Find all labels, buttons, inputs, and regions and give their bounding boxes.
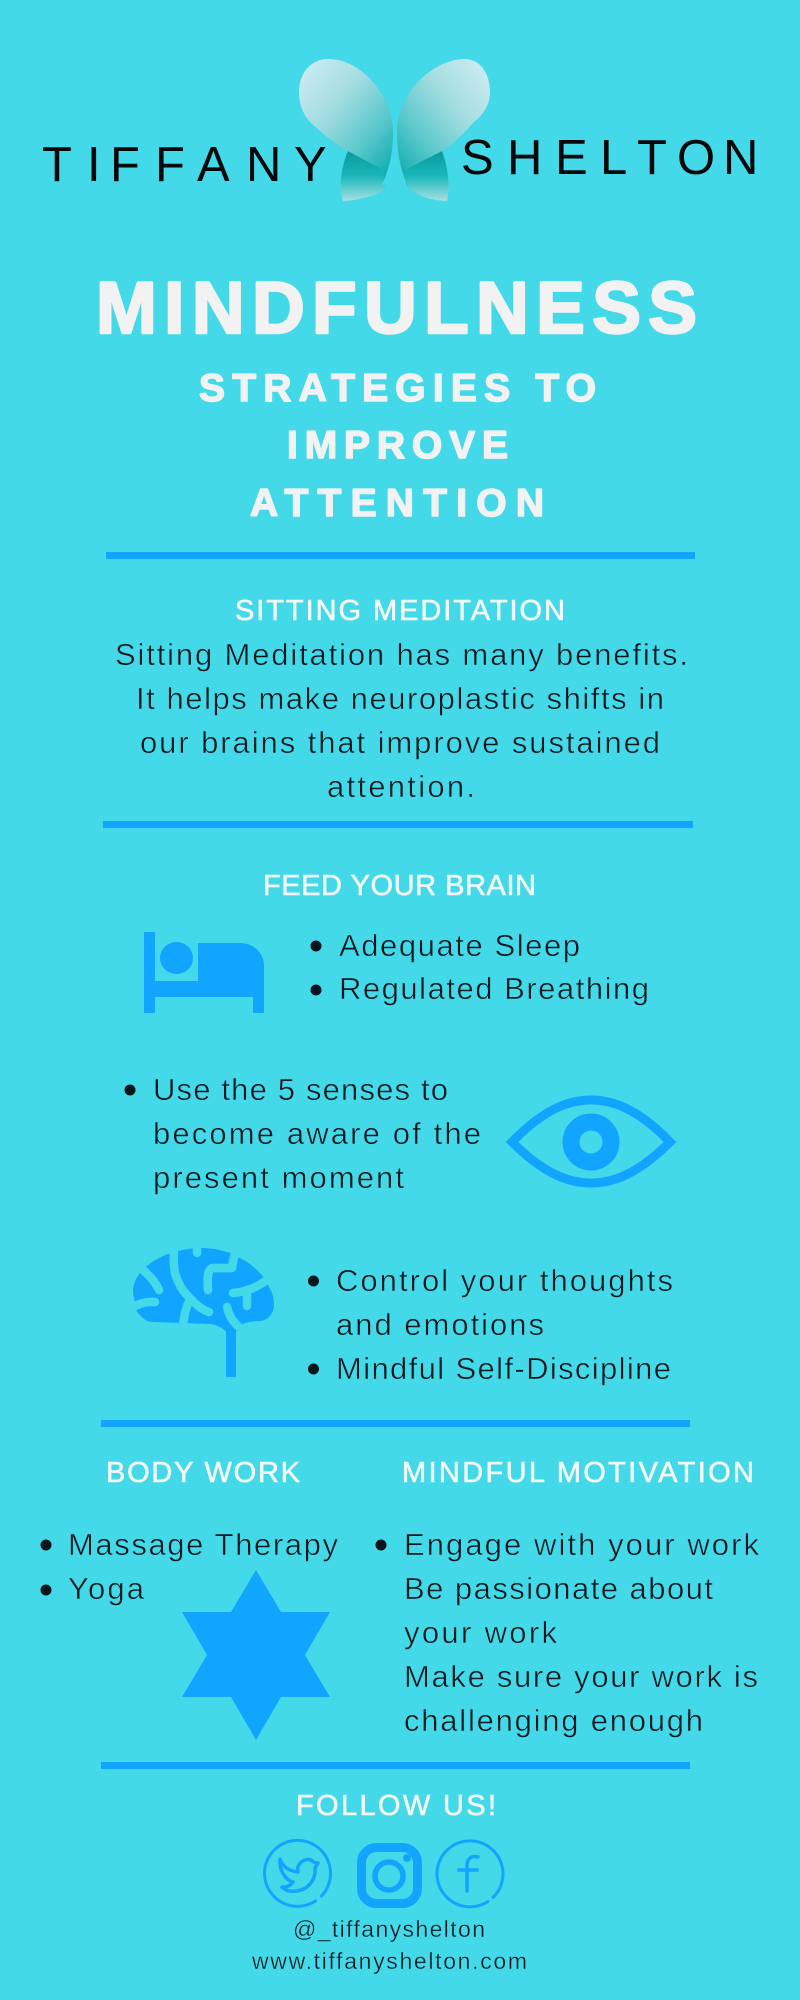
panel: feed your brain — [124, 870, 673, 1386]
icon: bed — [144, 932, 264, 1013]
panel: mindful motivation — [376, 1457, 760, 1738]
list: senses — [124, 1072, 481, 1195]
list: motivation: Be passionate about — [404, 1571, 713, 1606]
list: senses: become aware of the — [153, 1116, 481, 1151]
list: motivation: your work — [404, 1615, 558, 1650]
subtitle: ATTENTION — [250, 482, 544, 525]
icon: six-pointed star — [182, 1570, 330, 1740]
list: thoughts and discipline: and emotions — [336, 1307, 544, 1342]
heading: mindful motivation: MINDFUL MOTIVATION — [402, 1457, 754, 1489]
text: website: www.tiffanyshelton.com — [251, 1948, 527, 1974]
subtitle: STRATEGIES TO — [199, 367, 596, 410]
icon: facebook — [437, 1841, 503, 1907]
text: social handle: @_tiffanyshelton — [293, 1916, 485, 1942]
list: thoughts and discipline — [308, 1263, 673, 1386]
list: sleep and breathing — [310, 928, 649, 1006]
panel: sitting meditation — [115, 595, 688, 804]
list: motivation — [376, 1527, 760, 1738]
icon: butterfly — [299, 59, 490, 201]
list: senses: present moment — [153, 1160, 404, 1195]
logo wordmark: Tiffany: TIFFANY — [42, 138, 327, 192]
list: body work — [40, 1527, 338, 1606]
list: sleep and breathing: Regulated Breathing — [339, 971, 649, 1006]
text block: sitting meditation description — [115, 637, 688, 804]
logo wordmark: Shelton: SHELTON — [461, 131, 758, 185]
icon: twitter — [265, 1840, 331, 1906]
title: MINDFULNESS — [96, 268, 697, 349]
panel: body work — [40, 1457, 338, 1740]
list: sleep and breathing: Adequate Sleep — [339, 928, 580, 963]
heading: body work: BODY WORK — [106, 1457, 301, 1489]
list: body work: Yoga — [68, 1571, 145, 1606]
heading: follow us: FOLLOW US! — [296, 1790, 496, 1822]
subtitle: IMPROVE — [287, 424, 508, 467]
list: senses: Use the 5 senses to — [153, 1072, 448, 1107]
panel: follow us — [251, 1790, 527, 1974]
text block: sitting meditation description: It helps make neuroplastic shifts in — [136, 681, 664, 716]
logo — [42, 59, 758, 201]
list: body work: Massage Therapy — [68, 1527, 338, 1562]
icon: instagram — [362, 1848, 418, 1904]
icon: brain — [131, 1246, 274, 1377]
heading: sitting meditation: SITTING MEDITATION — [235, 595, 565, 627]
list: motivation: Engage with your work — [404, 1527, 760, 1562]
list: thoughts and discipline: Control your thoughts — [336, 1263, 673, 1298]
heading: feed your brain: FEED YOUR BRAIN — [263, 870, 536, 902]
text block: sitting meditation description: attention. — [327, 769, 475, 804]
text block: sitting meditation description: Sitting Meditation has many benefits. — [115, 637, 688, 672]
list: motivation: Make sure your work is — [404, 1659, 758, 1694]
text block: sitting meditation description: our brains that improve sustained — [140, 725, 660, 760]
list: motivation: challenging enough — [404, 1703, 703, 1738]
subtitle — [199, 367, 596, 525]
list: thoughts and discipline: Mindful Self-Discipline — [336, 1351, 671, 1386]
icon: eye — [512, 1100, 670, 1183]
